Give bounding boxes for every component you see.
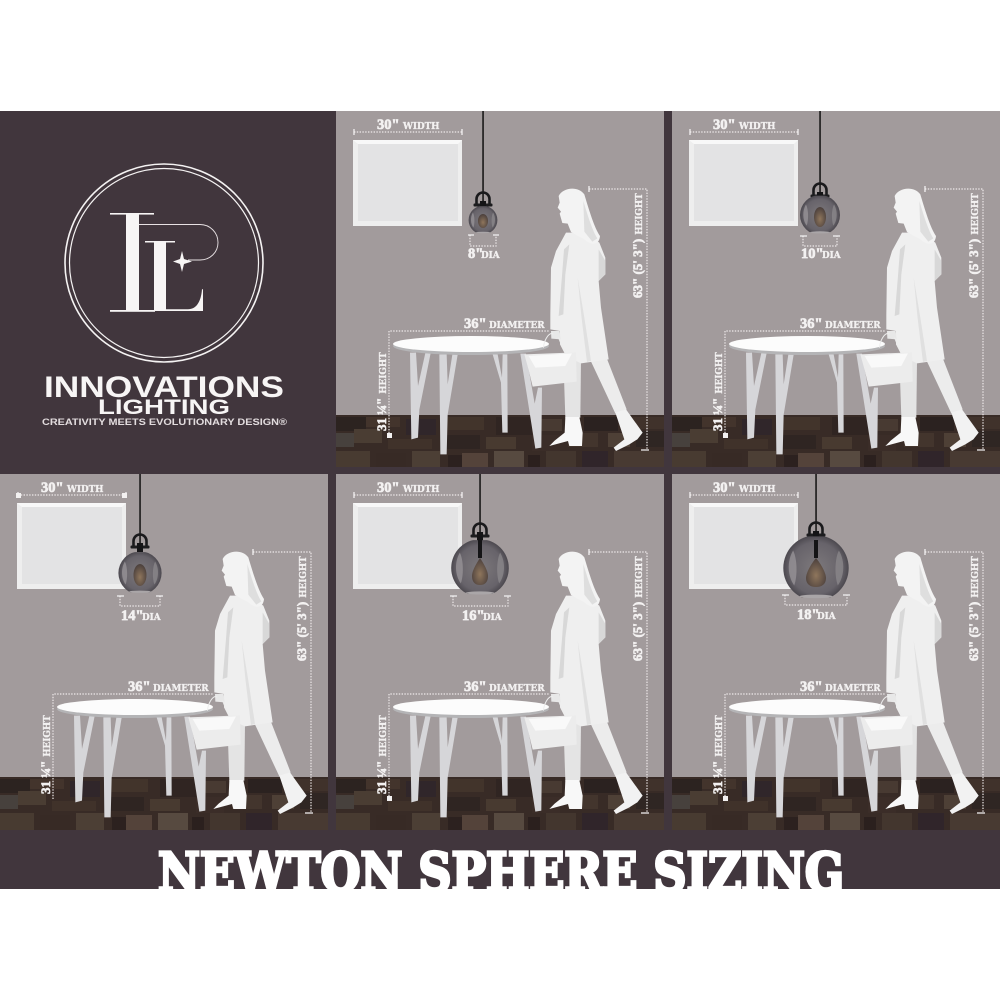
- dimension labels: 30": [377, 117, 400, 133]
- dimension labels: [16, 480, 313, 813]
- dimension labels: 8": [468, 246, 483, 262]
- dimension labels: 30": [377, 480, 400, 496]
- dimension labels: 63" (5' 3")HEIGHT: [966, 556, 981, 661]
- pendant 18 inch: [783, 474, 849, 601]
- dimension labels: 31 ¼"HEIGHT: [710, 715, 725, 794]
- dimension labels: 63" (5' 3")HEIGHT: [294, 556, 309, 661]
- dimension labels: 10": [801, 246, 824, 262]
- dimension labels: 63" (5' 3")HEIGHT: [630, 193, 645, 298]
- dimension labels: DIAMETER: [153, 684, 209, 694]
- dimension labels: [690, 117, 985, 450]
- panel: 10 inch pendant: [672, 111, 1000, 468]
- dimension labels: 30": [713, 117, 736, 133]
- dimension labels: 30": [41, 480, 64, 496]
- dimension labels: 63" (5' 3")HEIGHT: [966, 193, 981, 298]
- logo monogram: [110, 213, 218, 312]
- tagline: CREATIVITY MEETS EVOLUTIONARY DESIGN®: [42, 417, 287, 428]
- panel: 18 inch pendant: [672, 474, 1000, 830]
- dimension labels: 30": [713, 480, 736, 496]
- dimension labels: WIDTH: [738, 122, 775, 132]
- dimension labels: 36": [800, 316, 823, 332]
- brand name: INNOVATIONS: [44, 371, 284, 404]
- dimension labels: WIDTH: [402, 122, 439, 132]
- dimension labels: DIA: [481, 251, 500, 261]
- dimension labels: 31 ¼"HEIGHT: [374, 352, 389, 431]
- dimension labels: 31 ¼"HEIGHT: [710, 352, 725, 431]
- logo rings: [65, 164, 263, 362]
- dimension labels: 16": [462, 608, 485, 624]
- panel: 8 inch pendant: [336, 111, 664, 468]
- dimension labels: 36": [464, 679, 487, 695]
- pendant 16 inch: [451, 474, 509, 597]
- title: NEWTON SPHERE SIZING: [158, 842, 844, 904]
- panel: 14 inch pendant: [0, 474, 328, 830]
- brand sub-name: LIGHTING: [98, 396, 230, 419]
- dimension labels: DIA: [483, 613, 502, 623]
- dimension labels: DIAMETER: [489, 321, 545, 331]
- dimension labels: 14": [121, 608, 144, 624]
- pendant 10 inch: [800, 111, 840, 235]
- dimension labels: WIDTH: [402, 485, 439, 495]
- pendant 14 inch: [118, 474, 162, 595]
- dimension labels: DIAMETER: [825, 321, 881, 331]
- dimension labels: [354, 117, 649, 450]
- dimension labels: DIA: [817, 612, 836, 622]
- dimension labels: DIA: [822, 251, 841, 261]
- dimension labels: [354, 480, 649, 813]
- logo panel: [42, 164, 287, 428]
- dimension labels: DIA: [142, 613, 161, 623]
- dimension labels: 36": [464, 316, 487, 332]
- dimension labels: [690, 480, 985, 813]
- dimension labels: 31 ¼"HEIGHT: [38, 715, 53, 794]
- dimension labels: WIDTH: [738, 485, 775, 495]
- dimension labels: DIAMETER: [825, 684, 881, 694]
- dimension labels: 63" (5' 3")HEIGHT: [630, 556, 645, 661]
- dimension labels: 36": [128, 679, 151, 695]
- page background band: [0, 111, 1000, 889]
- dimension labels: 18": [797, 607, 820, 623]
- dimension labels: WIDTH: [66, 485, 103, 495]
- panel: 16 inch pendant: [336, 474, 664, 830]
- pendant 8 inch: [469, 111, 497, 234]
- dimension labels: DIAMETER: [489, 684, 545, 694]
- dimension labels: 31 ¼"HEIGHT: [374, 715, 389, 794]
- dimension labels: 36": [800, 679, 823, 695]
